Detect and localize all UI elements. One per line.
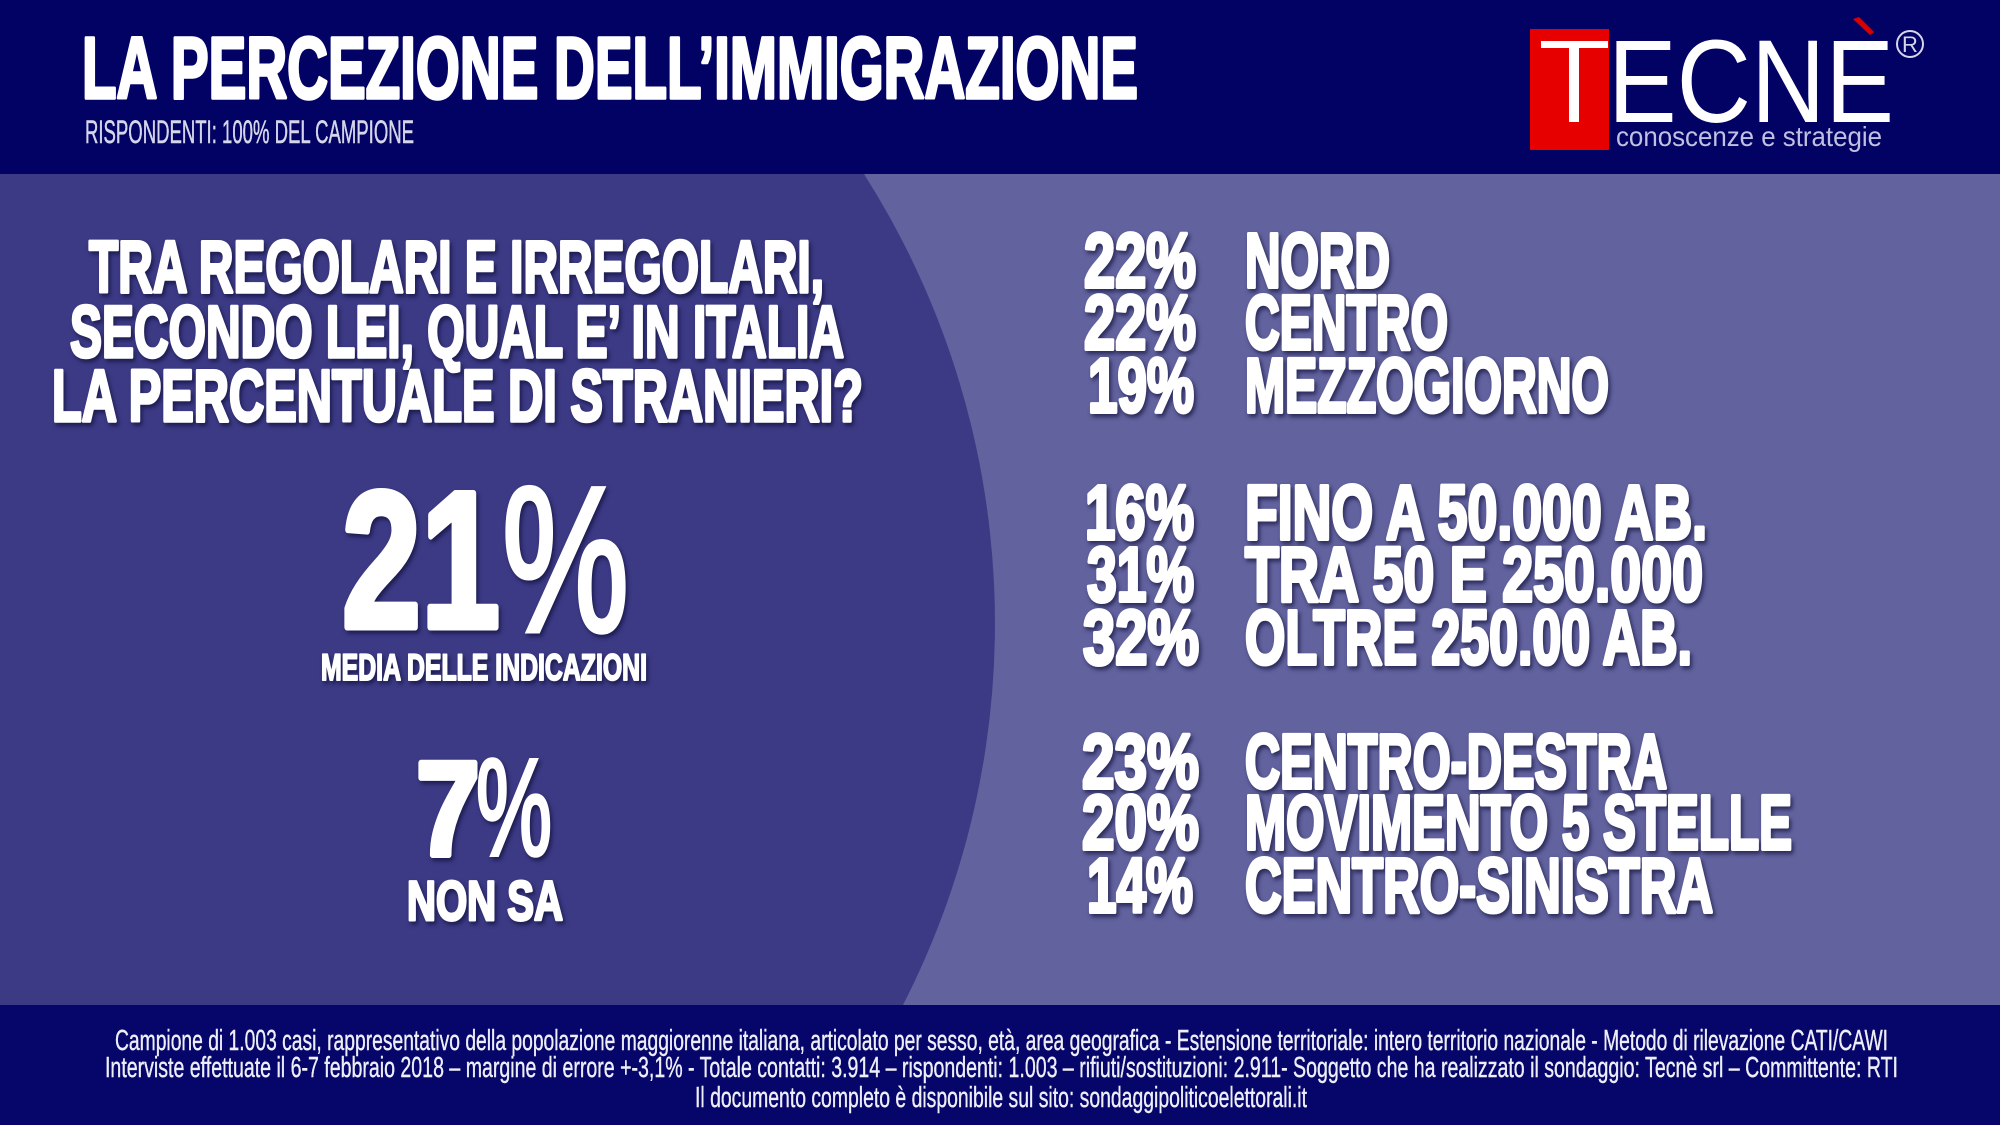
registered mark: [1897, 31, 1923, 57]
group: ampiezza centro: FINO A 50.000 AB.: [1245, 470, 1707, 556]
caption: non sa: NON SA: [407, 869, 563, 932]
key figure: 21% average: [321, 444, 647, 688]
group: area geografica: 22%: [1084, 218, 1196, 304]
group: area geografica: 22%: [1084, 280, 1196, 366]
registered mark: R: [1902, 32, 1918, 57]
group: area geografica: NORD: [1245, 218, 1390, 304]
logo letter T: [1541, 41, 1608, 122]
group: orientamento politico: CENTRO-DESTRA: [1245, 719, 1667, 805]
group: ampiezza centro: 16%: [1085, 470, 1194, 556]
group: orientamento politico: CENTRO-SINISTRA: [1245, 843, 1713, 929]
panel: right background: [0, 174, 2000, 1005]
key figure: 21% average: %: [502, 444, 629, 675]
header band: [0, 0, 2000, 174]
group: orientamento politico: 23%: [1082, 719, 1199, 805]
key figure: 21% average: 21: [342, 452, 500, 669]
group: ampiezza centro: 31%: [1087, 532, 1194, 618]
question heading: LA PERCENTUALE DI STRANIERI?: [52, 356, 863, 437]
group: orientamento politico: [1082, 719, 1792, 929]
logo letters: ECNE: [1608, 16, 1894, 148]
logo red accent: [1853, 17, 1874, 35]
group: area geografica: [1084, 218, 1609, 429]
logo: Tecnè: [1530, 16, 1923, 152]
footer band: [0, 1005, 2000, 1125]
key figure: 7% don't know: [407, 731, 563, 932]
footer methodology note: [105, 1025, 1898, 1114]
title: LA PERCEZIONE DELL’IMMIGRAZIONE: [82, 20, 1138, 117]
group: area geografica: 19%: [1088, 343, 1194, 429]
question heading: TRA REGOLARI E IRREGOLARI,: [89, 227, 824, 308]
group: ampiezza centro: TRA 50 E 250.000: [1245, 532, 1703, 618]
group: ampiezza centro: OLTRE 250.00 AB.: [1245, 595, 1692, 681]
question heading: SECONDO LEI, QUAL E’ IN ITALIA: [70, 292, 844, 373]
key figure: 7% don't know: 7: [416, 735, 480, 884]
group: ampiezza centro: 32%: [1083, 595, 1199, 681]
logo tagline: conoscenze e strategie: [1616, 121, 1882, 152]
caption: media delle indicazioni: MEDIA DELLE INDICAZIONI: [321, 647, 647, 688]
key figure: 7% don't know: %: [476, 731, 552, 885]
question heading: [52, 227, 863, 437]
logo red square: [1530, 29, 1609, 150]
footer methodology note: Il documento completo è disponibile sul sito: sondaggipoliticoelettorali.it: [695, 1082, 1307, 1114]
group: area geografica: CENTRO: [1245, 280, 1448, 366]
group: area geografica: MEZZOGIORNO: [1245, 343, 1609, 429]
group: orientamento politico: 14%: [1087, 843, 1193, 929]
group: orientamento politico: 20%: [1082, 780, 1199, 866]
panel: left curved background: [0, 174, 995, 1005]
subtitle: RISPONDENTI: 100% DEL CAMPIONE: [85, 114, 414, 150]
group: ampiezza centro: [1083, 470, 1707, 681]
